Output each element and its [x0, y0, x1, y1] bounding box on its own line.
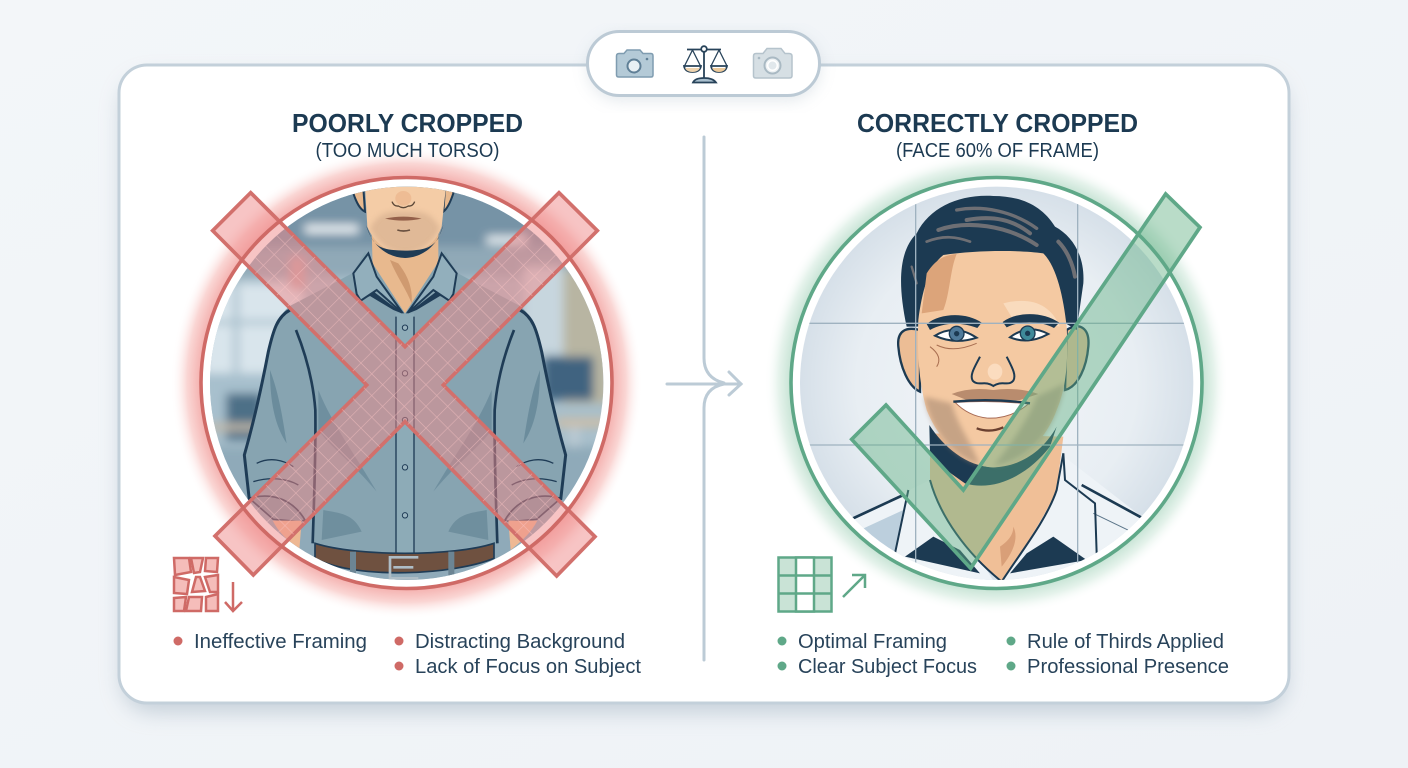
hair highlights — [912, 208, 1075, 283]
bullet list: correctly cropped — [778, 631, 1229, 678]
top icon pill — [588, 32, 820, 100]
red ring — [201, 178, 612, 588]
photo: face illustration — [793, 180, 1200, 587]
icon: camera right — [754, 48, 792, 78]
eyes and brows — [927, 314, 1059, 367]
bullet list: poorly cropped — [174, 631, 641, 678]
icon: thirds grid with up arrow — [778, 558, 865, 612]
belt — [315, 543, 494, 578]
bullet list: correctly cropped: Optimal Framing — [798, 631, 947, 653]
shirt — [852, 453, 1142, 580]
heading: poorly cropped — [292, 108, 523, 162]
subheading: face 60% of frame: (FACE 60% OF FRAME) — [896, 140, 1099, 162]
heading: correctly cropped — [857, 108, 1138, 162]
icon: camera left — [616, 50, 653, 77]
bullet list: poorly cropped: Distracting Background — [415, 631, 625, 653]
red x mark — [213, 193, 597, 576]
face — [918, 251, 1067, 467]
neck — [929, 425, 1063, 582]
bullet list: correctly cropped: Professional Presence — [1027, 656, 1229, 678]
bullet list: poorly cropped: Ineffective Framing — [194, 631, 367, 653]
heading: correctly cropped: CORRECTLY CROPPED — [857, 108, 1138, 138]
subheading: too much torso: (TOO MUCH TORSO) — [316, 140, 500, 162]
shirt — [244, 252, 566, 557]
panel: poorly cropped portrait — [170, 147, 642, 619]
green ring — [791, 178, 1202, 588]
panel: correctly cropped portrait — [764, 151, 1228, 615]
bullet list: correctly cropped: Rule of Thirds Applied — [1027, 631, 1224, 653]
man's neck and face — [353, 187, 453, 315]
main comparison card — [119, 65, 1289, 712]
rule of thirds grid — [808, 203, 1185, 563]
green glow — [764, 151, 1228, 615]
nose — [972, 357, 1014, 386]
bullet list: correctly cropped: Clear Subject Focus — [798, 656, 977, 678]
bullet list: poorly cropped: Lack of Focus on Subject — [415, 656, 641, 678]
smile — [953, 400, 1030, 431]
ears — [898, 326, 1089, 392]
divider with arrow — [667, 137, 741, 660]
green check mark — [852, 194, 1200, 568]
icon: balance scale — [684, 46, 727, 82]
hair — [901, 196, 1083, 330]
photo: torso illustration — [203, 180, 610, 587]
heading: poorly cropped: POORLY CROPPED — [292, 108, 523, 138]
icon: broken grid with down arrow — [174, 558, 242, 611]
red glow — [170, 147, 642, 619]
